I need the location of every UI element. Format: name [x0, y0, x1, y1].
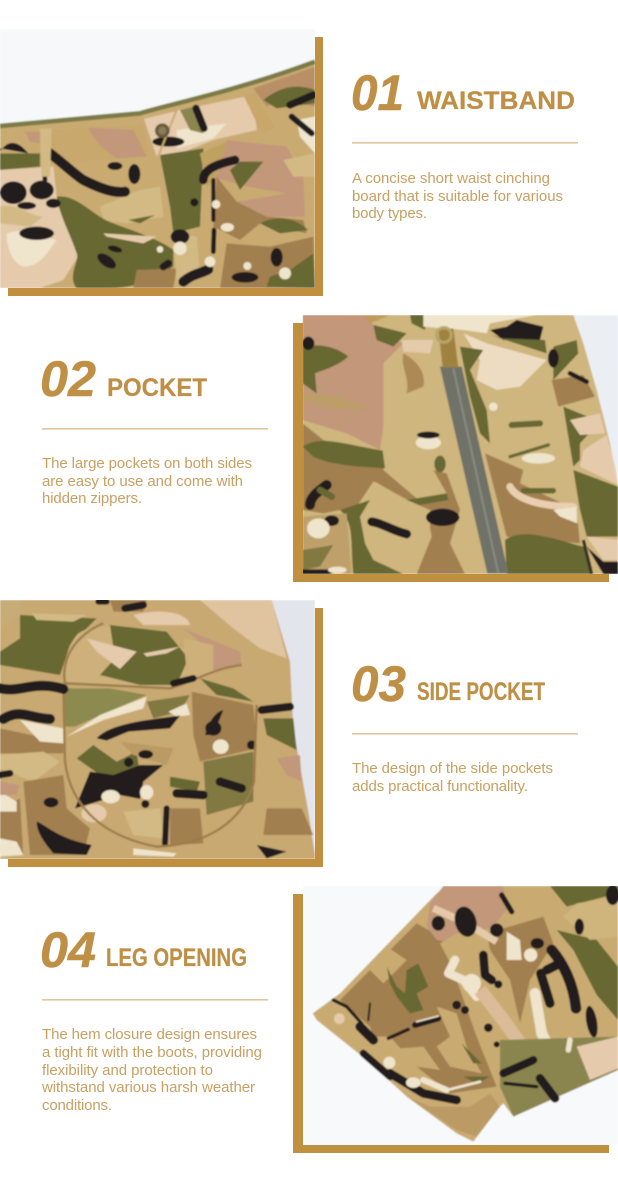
description: withstand various harsh weather	[41, 1079, 255, 1096]
number 03: 03	[351, 656, 406, 712]
divider	[352, 733, 578, 735]
description: The hem closure design ensures	[42, 1026, 257, 1043]
description: board that is suitable for various	[352, 188, 563, 205]
section 01: waistband	[0, 29, 578, 296]
description: hidden zippers.	[42, 490, 142, 507]
divider	[352, 142, 578, 144]
description: body types.	[352, 205, 427, 222]
description: The large pockets on both sides	[42, 455, 252, 472]
heading: side pocket: SIDE POCKET	[417, 678, 545, 706]
description: flexibility and protection to	[42, 1062, 213, 1079]
description: adds practical functionality.	[352, 778, 528, 795]
section 04: leg opening	[40, 885, 618, 1153]
heading: leg opening: LEG OPENING	[106, 944, 247, 972]
description: a tight fit with the boots, providing	[42, 1044, 262, 1061]
description: The design of the side pockets	[352, 760, 553, 777]
description	[352, 170, 563, 222]
section 03: side pocket	[0, 600, 578, 867]
number 02: 02	[40, 351, 96, 407]
description	[41, 1026, 262, 1114]
number 04: 04	[40, 922, 96, 978]
heading: pocket: POCKET	[107, 374, 207, 402]
description	[42, 455, 252, 507]
divider	[42, 428, 268, 430]
photo: zipper pocket	[302, 315, 618, 574]
description: are easy to use and come with	[42, 473, 243, 490]
accent bracket	[293, 323, 609, 582]
divider	[42, 999, 268, 1001]
photo: leg opening	[303, 885, 618, 1145]
section 02: pocket	[40, 315, 618, 582]
accent bracket	[293, 894, 609, 1153]
description	[352, 760, 553, 795]
photo: waistband	[0, 58, 315, 288]
photo: side pocket	[0, 600, 315, 859]
description: A concise short waist cinching	[352, 170, 550, 187]
accent bracket	[8, 37, 323, 296]
description: conditions.	[42, 1097, 112, 1114]
heading: waistband: WAISTBAND	[417, 87, 575, 115]
accent bracket	[8, 608, 323, 867]
number 01: 01	[351, 65, 404, 121]
